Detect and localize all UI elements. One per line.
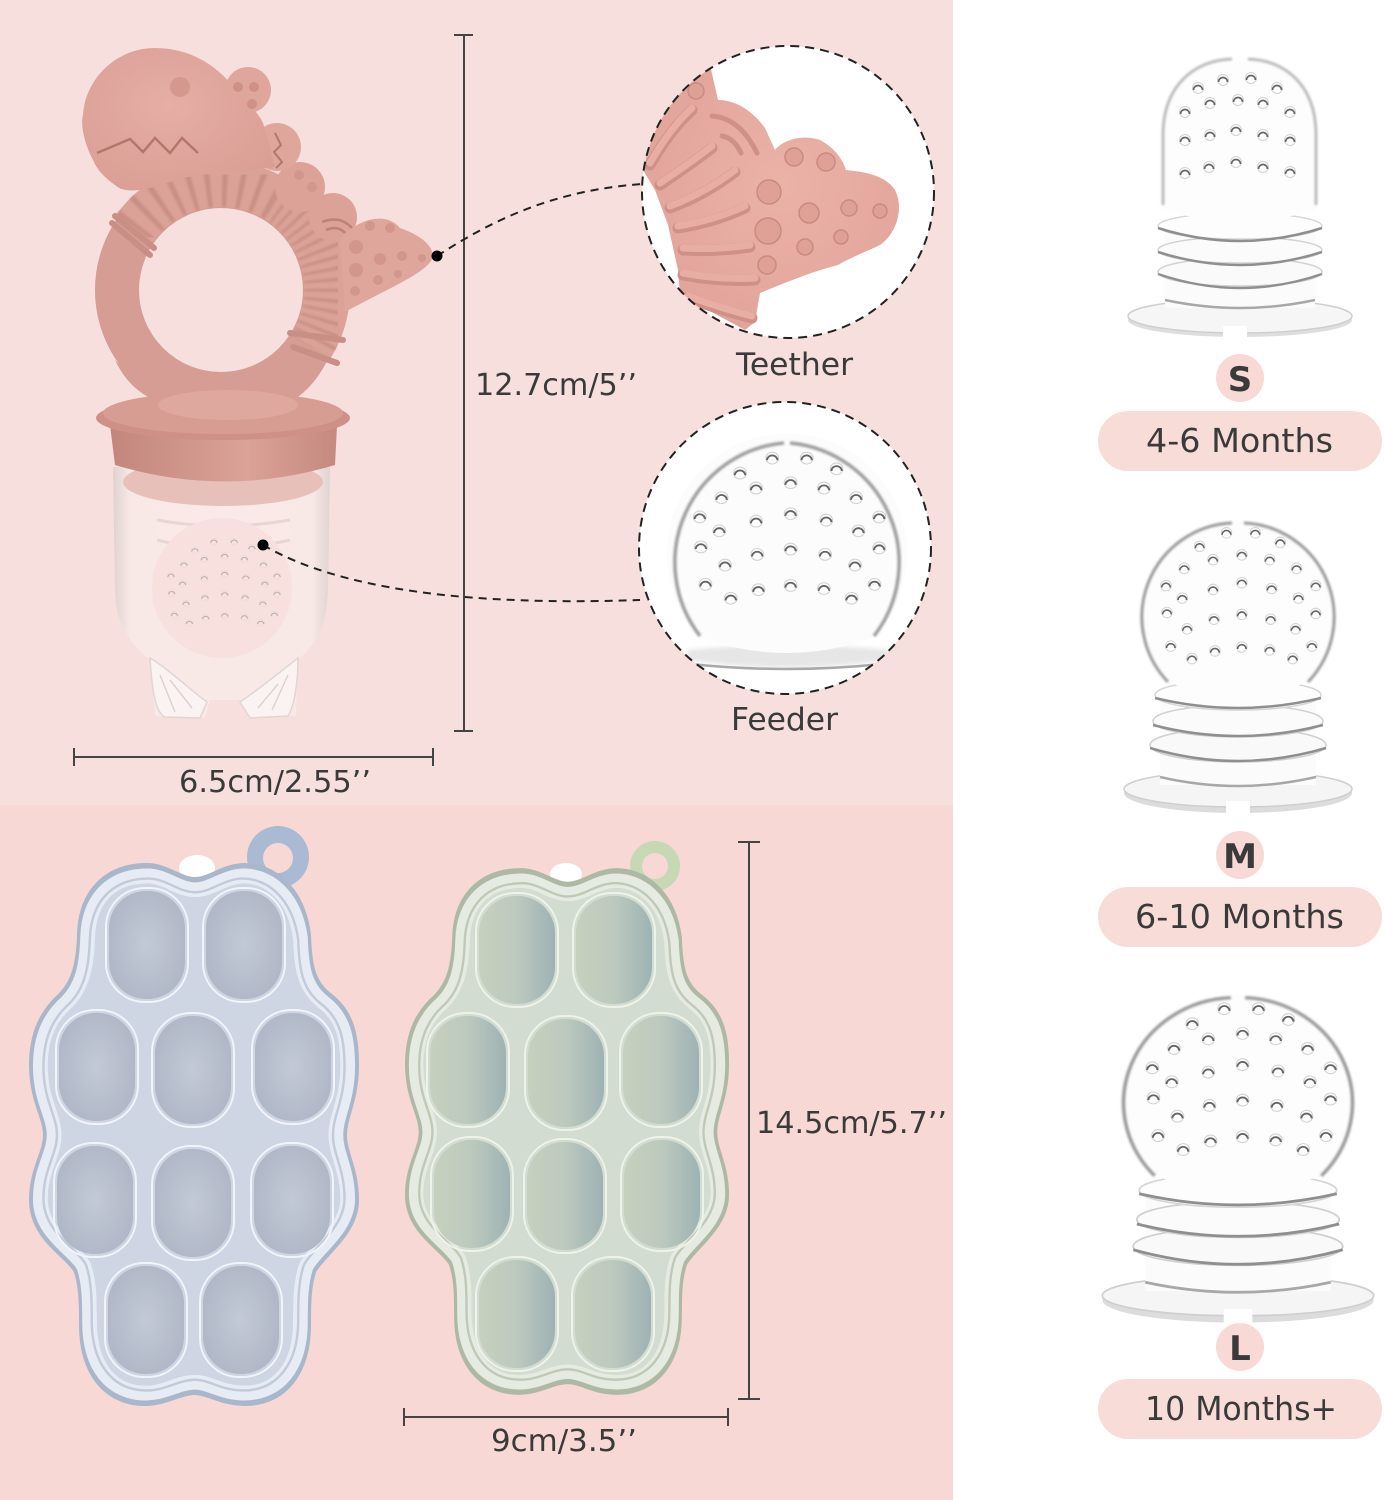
dimension: height 12.7cm: 12.7cm/5’’ bbox=[475, 368, 637, 403]
age pill 10 months+ bbox=[1098, 1379, 1382, 1439]
transparent cup bbox=[113, 467, 330, 718]
size badge S: S bbox=[1228, 360, 1252, 400]
tray hanging loop bbox=[630, 841, 680, 891]
connector: feeder to callout bbox=[258, 540, 640, 601]
dimension: tray height 14.5cm: 14.5cm/5.7’’ bbox=[756, 1106, 947, 1141]
label: feeder: Feeder bbox=[731, 702, 838, 738]
age pill 6-10 months: 6-10 Months bbox=[1135, 897, 1344, 936]
green freezer tray bbox=[414, 841, 720, 1386]
age pill 4-6 months: 4-6 Months bbox=[1146, 421, 1333, 460]
nipple size S bbox=[1128, 58, 1352, 338]
size badge L bbox=[1216, 1323, 1264, 1371]
connector: teether to callout bbox=[432, 184, 642, 262]
tail bbox=[275, 162, 433, 312]
size badge M: M bbox=[1223, 837, 1257, 877]
dimension: width 6.5cm: 6.5cm/2.55’’ bbox=[179, 765, 371, 800]
age pill 4-6 months bbox=[1098, 411, 1382, 471]
callout: teether bbox=[640, 46, 934, 338]
ribbed arc bbox=[112, 184, 343, 363]
silicone ring handle bbox=[115, 186, 330, 402]
size badge M bbox=[1216, 831, 1264, 879]
nipple size M bbox=[1124, 520, 1352, 815]
age pill 6-10 months bbox=[1098, 887, 1382, 947]
panel: pink background bbox=[0, 0, 953, 1500]
blue freezer tray bbox=[38, 826, 350, 1397]
dimension: tray height 14.5cm bbox=[738, 842, 947, 1399]
dinosaur head bbox=[82, 48, 301, 190]
age pill 10 months+: 10 Months+ bbox=[1145, 1389, 1337, 1428]
size badge S bbox=[1216, 354, 1264, 402]
nipple size L bbox=[1102, 995, 1374, 1325]
tray hanging loop bbox=[247, 826, 309, 888]
dimension: tray width 9cm: 9cm/3.5’’ bbox=[491, 1424, 637, 1459]
label: teether: Teether bbox=[735, 347, 853, 383]
dimension: width 6.5cm bbox=[74, 748, 433, 800]
callout: feeder bbox=[639, 402, 931, 694]
cup feet bbox=[150, 658, 298, 718]
dimension: height 12.7cm bbox=[454, 35, 637, 731]
dimension: tray width 9cm bbox=[404, 1408, 728, 1459]
cap bbox=[96, 390, 350, 506]
size badge L: L bbox=[1229, 1329, 1251, 1369]
inner mesh feeder bbox=[152, 500, 292, 658]
teether and feeder product bbox=[82, 48, 433, 718]
